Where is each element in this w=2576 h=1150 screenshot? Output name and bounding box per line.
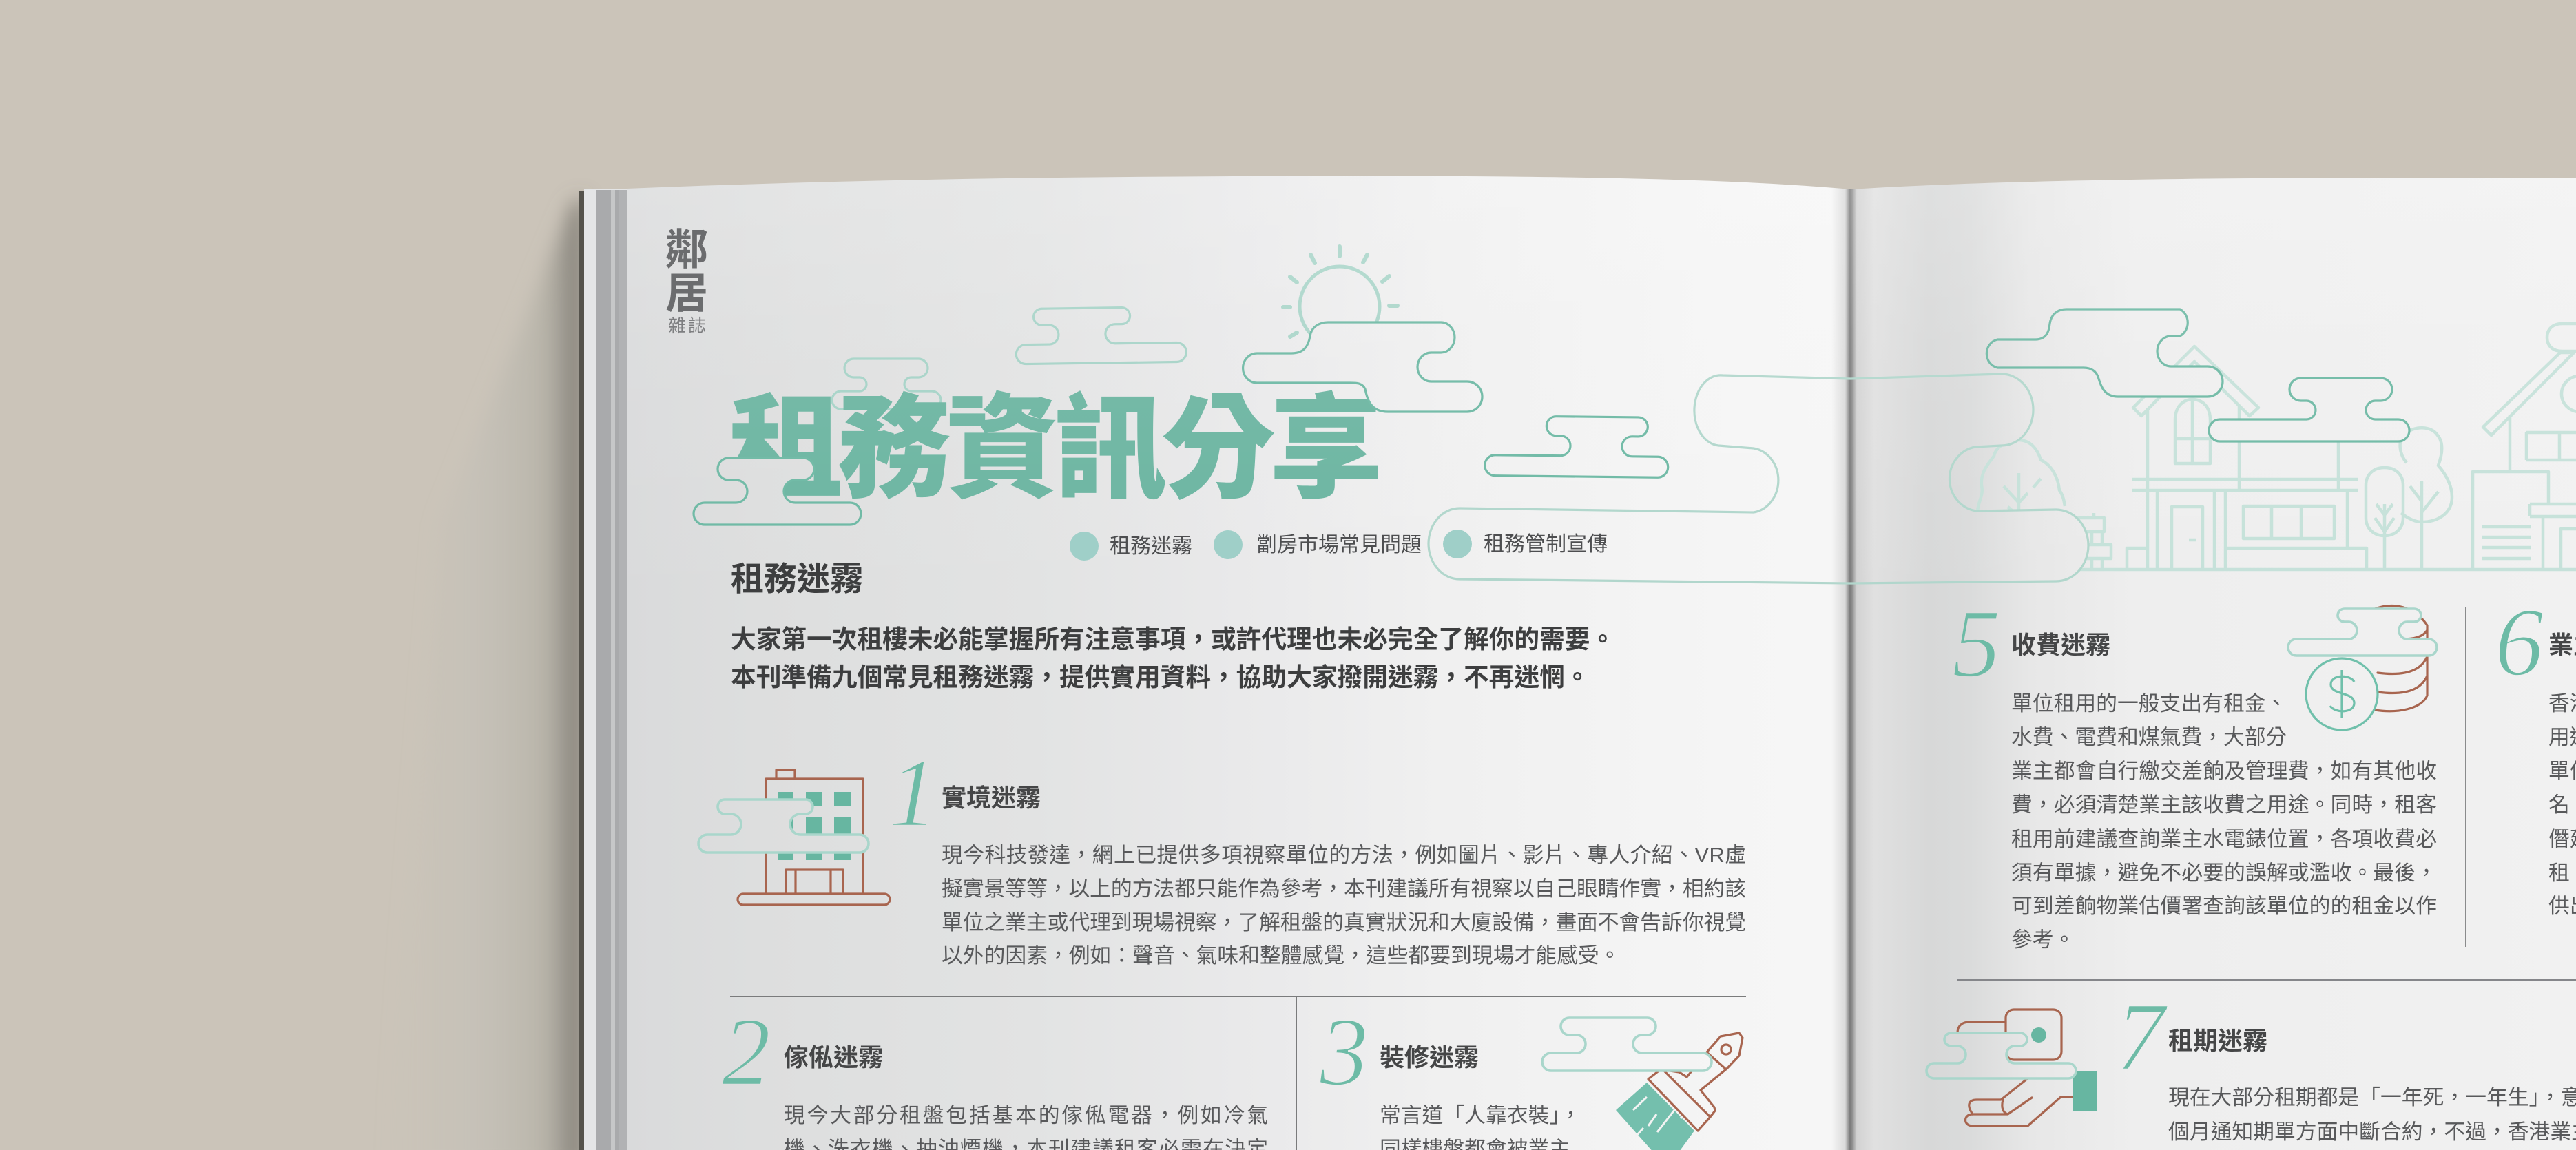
tall tree: [2366, 468, 2403, 569]
number 2: 2: [722, 997, 771, 1106]
title: 租務資訊分享: [729, 386, 1383, 512]
body 3: 常言道「人靠衣裝」，: [1380, 1103, 1581, 1127]
heading 1: 實境迷霧: [942, 784, 1041, 812]
cloud top right page: [1986, 309, 2223, 397]
house illustration: [1977, 324, 2576, 569]
divider line right page: [1957, 979, 2576, 981]
body 1: 單位之業主或代理到現場視察，了解租盤的真實狀況和大廈設備，畫面不會告訴你視覺: [942, 910, 1746, 934]
body 6: [2548, 691, 2576, 918]
icon: coin stack with cloud: [2288, 605, 2437, 730]
body 1: [942, 843, 1746, 968]
body 5: [2011, 691, 2437, 952]
open book pages: [627, 176, 2576, 1150]
column divider right page: [2465, 607, 2466, 947]
body 5: 單位租用的一般支出有租金、: [2011, 691, 2287, 715]
ground line: [2076, 568, 2576, 571]
signpost: [2077, 513, 2111, 569]
intro text: 大家第一次租樓未必能掌握所有注意事項，或許代理也未必完全了解你的需要。: [731, 625, 1615, 654]
main house: [2127, 346, 2367, 569]
page light overlay: [627, 176, 2576, 620]
body 1: 擬實景等等，以上的方法都只能作為參考，本刊建議所有視察以自己眼睛作實，相約該: [942, 877, 1746, 901]
body 5: 費，必須清楚業主該收費之用途。同時，租客: [2011, 793, 2437, 817]
cloud over sun and title: [1243, 322, 1482, 412]
body 7: [2168, 1085, 2576, 1144]
number 6: 6: [2495, 587, 2544, 696]
icon: paint brush with cloud: [1542, 1018, 1743, 1150]
logo: [665, 227, 708, 336]
cloud outline upper middle: [1015, 306, 1187, 364]
right house: [2473, 324, 2576, 569]
body 5: 參考。: [2011, 928, 2075, 952]
body 5: 可到差餉物業估價署查詢該單位的的租金以作: [2011, 894, 2437, 918]
item 2: [722, 997, 1268, 1150]
number 5: 5: [1952, 589, 2001, 698]
item 5: [1952, 589, 2437, 952]
heading 7: 租期迷霧: [2168, 1027, 2267, 1055]
heading 5: 收費迷霧: [2011, 631, 2110, 659]
large cloud across spine: [1429, 374, 2088, 583]
logo: 鄰: [665, 227, 708, 274]
body 5: 租用前建議查詢業主水電錶位置，各項收費必: [2011, 827, 2437, 851]
icon: building with cloud: [698, 770, 890, 905]
legend: 租務管制宣傳: [1484, 533, 1608, 556]
heading 3: 裝修迷霧: [1380, 1043, 1479, 1071]
small cloud middle: [1485, 416, 1668, 477]
item 6: [2495, 587, 2576, 918]
cloud outline behind title: [832, 359, 941, 409]
book page edges: [579, 189, 628, 1150]
sun: [1283, 247, 1398, 346]
body 5: 水費、電費和煤氣費，大部分: [2011, 725, 2287, 749]
item 1: [698, 738, 1746, 968]
body 6: 租: [2548, 861, 2570, 885]
legend: 租務迷霧: [1110, 535, 1192, 558]
logo: 雜誌: [668, 315, 708, 336]
legend: [1070, 530, 1608, 561]
body 3: [1380, 1103, 1581, 1150]
body 1: 現今科技發達，網上已提供多項視察單位的方法，例如圖片、影片、專人介紹、VR虛: [942, 843, 1746, 867]
icon: hand with banknote and cloud: [1926, 1010, 2097, 1126]
heading 2: 傢俬迷霧: [784, 1043, 883, 1071]
body 5: 業主都會自行繳交差餉及管理費，如有其他收: [2011, 759, 2437, 783]
cloud over title left: [694, 458, 861, 525]
body 5: 須有單據，避免不必要的誤解或濫收。最後，: [2011, 861, 2437, 885]
body 2: [784, 1103, 1268, 1150]
round tree: [2400, 428, 2452, 569]
body 1: 以外的因素，例如：聲音、氣味和整體感覺，這些都要到現場才能感受。: [942, 943, 1620, 968]
intro text: 本刊準備九個常見租務迷霧，提供實用資料，協助大家撥開迷霧，不再迷惘。: [731, 663, 1590, 691]
number 3: 3: [1319, 997, 1369, 1106]
logo: 居: [665, 270, 708, 317]
number 7: 7: [2116, 982, 2168, 1091]
body 2: 現今大部分租盤包括基本的傢俬電器，例如冷氣: [784, 1103, 1268, 1127]
tree left: [1977, 440, 2065, 511]
book shadow: [386, 196, 583, 1150]
item 3: [1319, 997, 1743, 1150]
cloud over house: [2209, 378, 2409, 441]
intro text: [731, 625, 1615, 691]
number 1: 1: [889, 738, 937, 847]
divider lines left page: [730, 996, 1746, 1150]
legend: 劏房市場常見問題: [1256, 534, 1422, 556]
item 7: [1926, 982, 2576, 1144]
body 6: 名: [2548, 793, 2570, 817]
section heading: 租務迷霧: [731, 561, 863, 598]
